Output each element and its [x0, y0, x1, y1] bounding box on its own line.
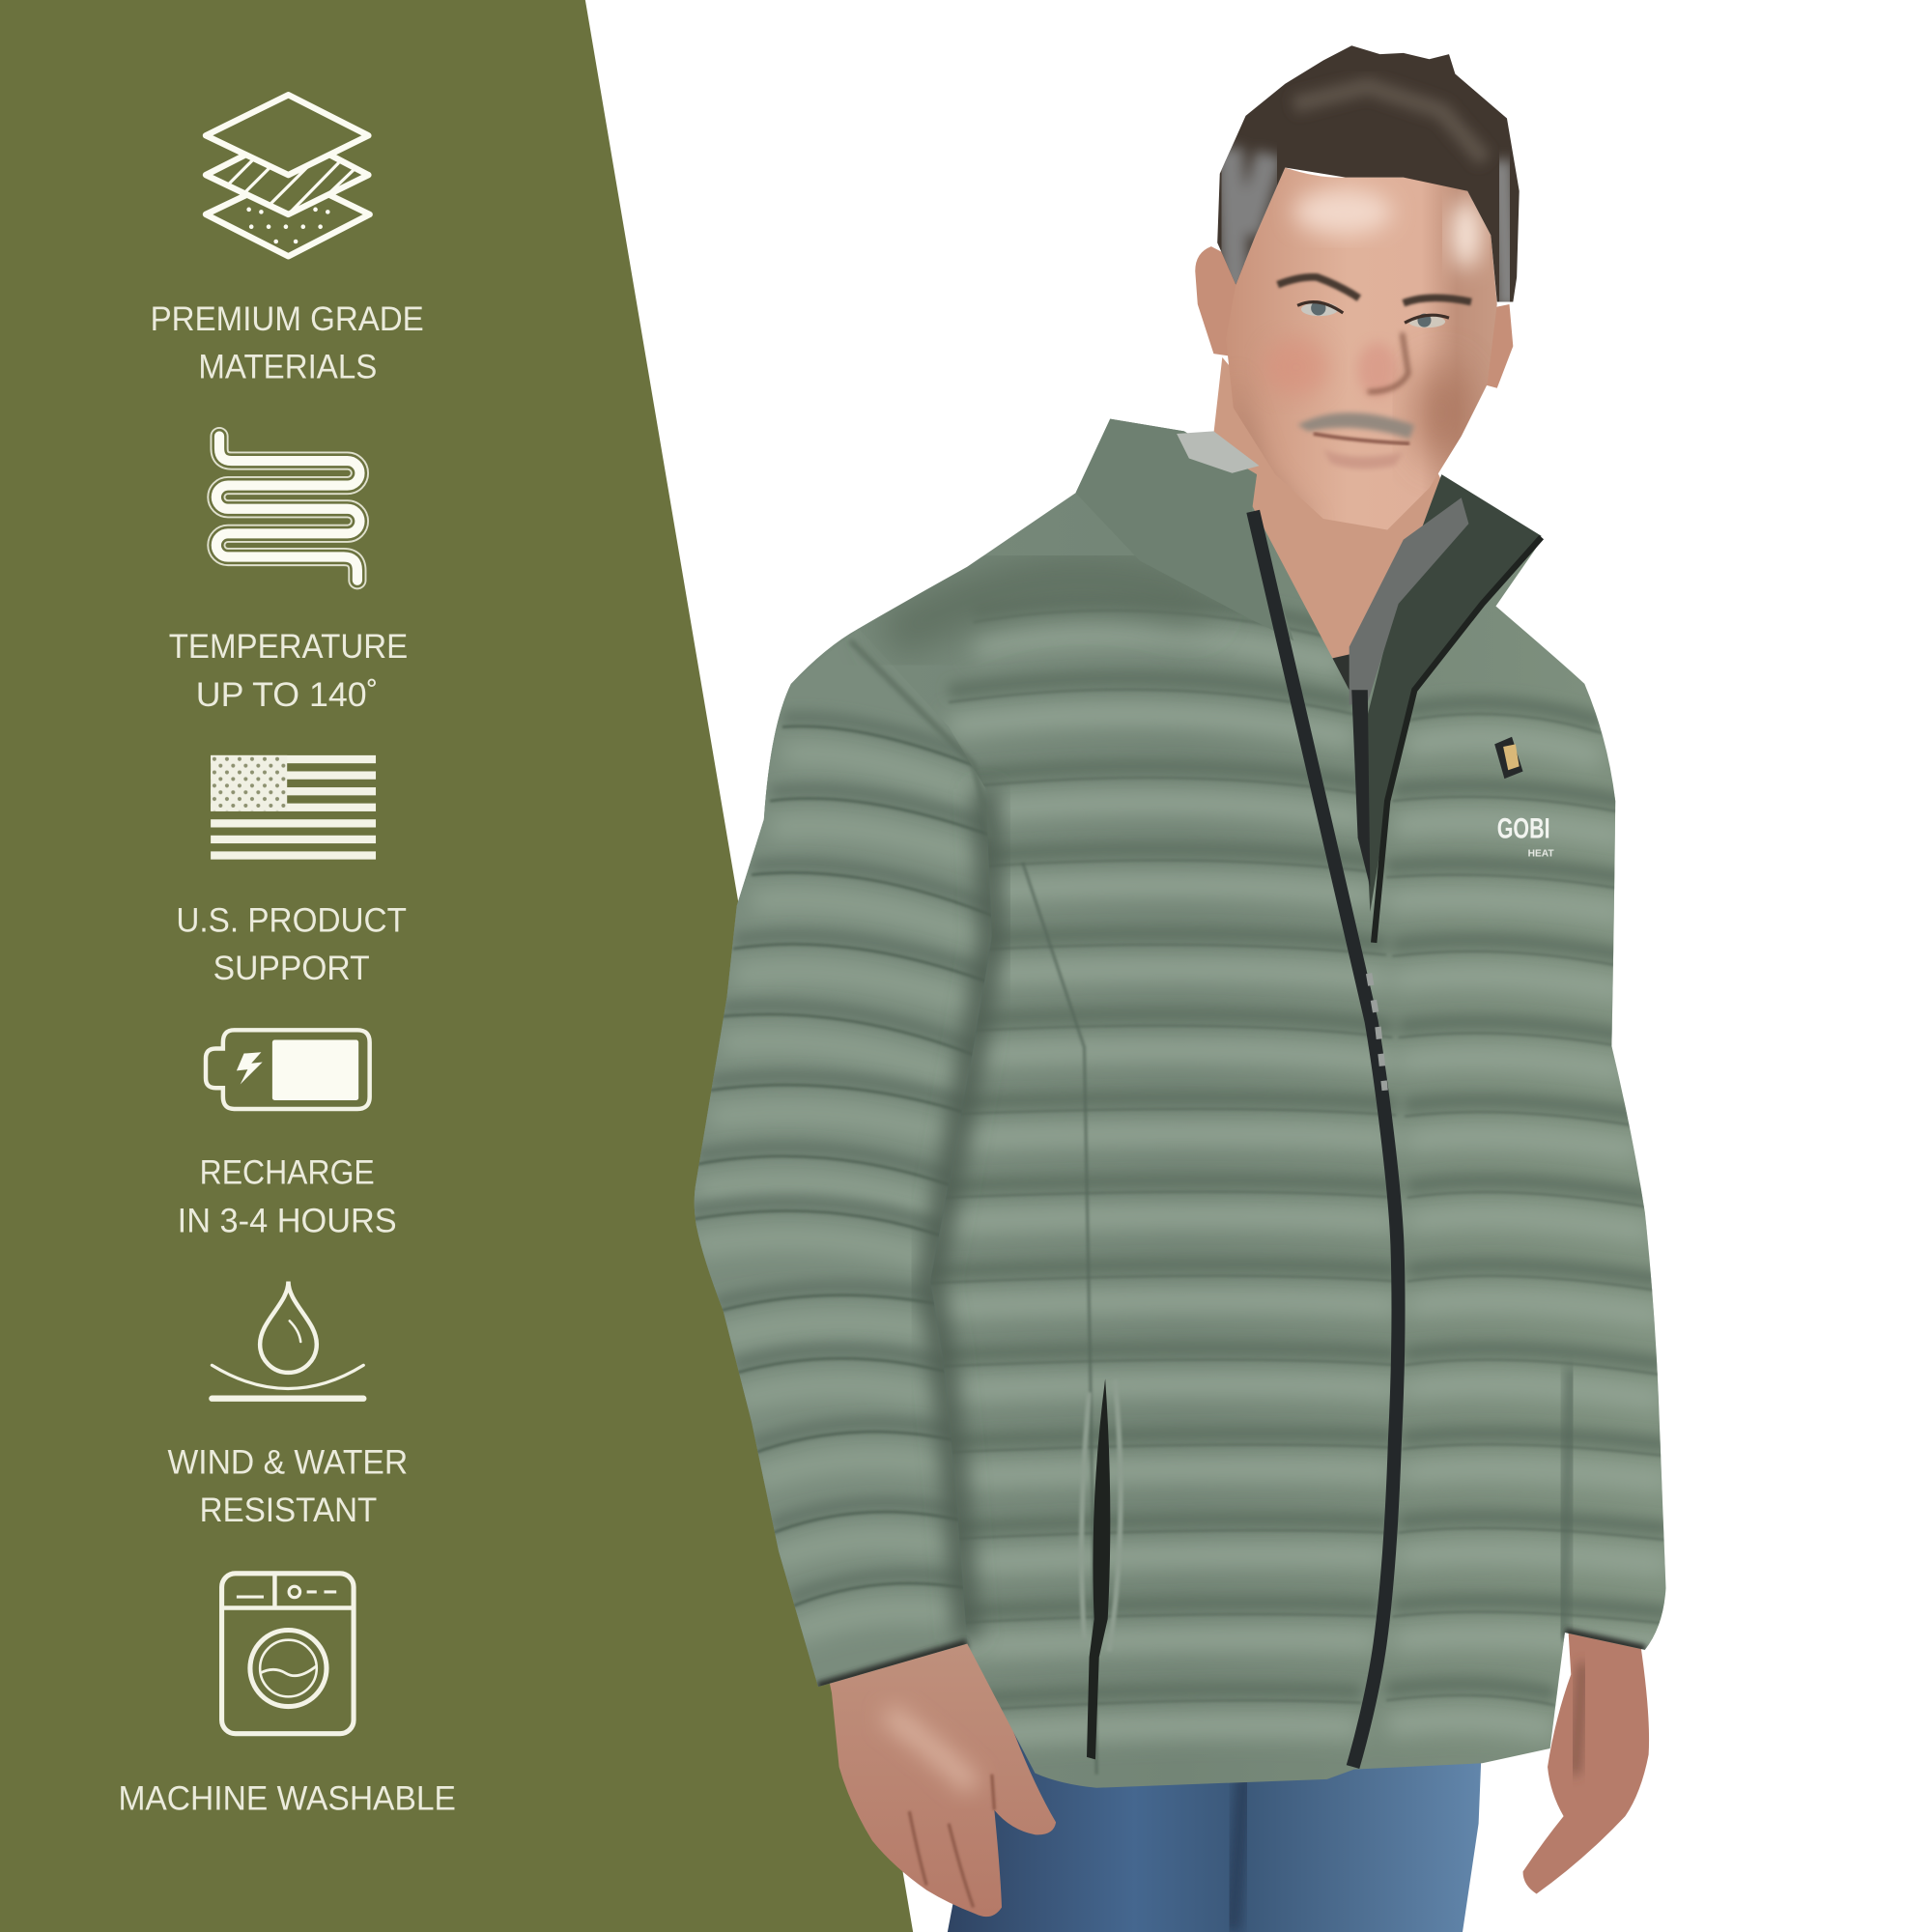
panel: green feature panel — [0, 0, 913, 1932]
hair — [1217, 45, 1520, 308]
jacket logo: GOBI — [1497, 812, 1550, 844]
jacket body — [666, 419, 1669, 1788]
left hand — [826, 1620, 1056, 1917]
t-shirt — [1328, 653, 1368, 764]
inner lining with fleece — [1350, 474, 1542, 912]
chest badge — [1494, 737, 1523, 779]
photo: man wearing green puffer jacket — [666, 45, 1669, 1932]
face — [1226, 167, 1497, 529]
right hand — [1523, 1614, 1649, 1893]
main zipper — [1253, 511, 1398, 1767]
eyes — [1297, 300, 1449, 327]
icon: washing machine — [222, 1574, 354, 1734]
side seam — [1023, 863, 1096, 1775]
text: recharge in 3-4 hours: RECHARGE — [200, 1154, 375, 1192]
pocket zipper — [1082, 1378, 1121, 1759]
text: temperature up to 140: UP TO 140˚ — [196, 676, 379, 714]
icon: US flag — [211, 755, 376, 860]
zipper pull — [1369, 974, 1385, 1091]
neck — [1213, 357, 1460, 702]
cuff shadow — [818, 1633, 1645, 1687]
mouth — [1314, 434, 1409, 443]
eyebrows — [1278, 277, 1471, 303]
text: machine washable: MACHINE WASHABLE — [118, 1780, 456, 1818]
ears — [1195, 246, 1513, 388]
icon: water drop — [212, 1282, 363, 1399]
text: recharge in 3-4 hours — [178, 1154, 397, 1240]
text: temperature up to 140: TEMPERATURE — [169, 628, 408, 666]
text: wind and water resistant: RESISTANT — [200, 1492, 377, 1529]
text: temperature up to 140 — [169, 628, 408, 714]
jacket logo — [1497, 812, 1554, 859]
nose shadow — [1368, 332, 1408, 392]
text: recharge in 3-4 hours: IN 3-4 HOURS — [178, 1203, 397, 1240]
text: US product support: SUPPORT — [213, 950, 370, 987]
text: premium grade materials — [151, 300, 424, 386]
icon: battery charging — [206, 1030, 370, 1109]
head — [1195, 45, 1520, 529]
text: premium grade materials: MATERIALS — [198, 349, 377, 386]
icon: layered materials — [206, 95, 370, 256]
collar — [1076, 419, 1293, 640]
jacket logo: HEAT — [1528, 848, 1554, 859]
jeans — [948, 1731, 1482, 1932]
sleeve — [694, 628, 991, 1687]
text: US product support — [176, 901, 407, 987]
right placket edge — [1374, 537, 1542, 943]
icon: heating element — [216, 437, 359, 581]
text: wind and water resistant — [167, 1444, 408, 1529]
text: premium grade materials: PREMIUM GRADE — [151, 300, 424, 338]
text: wind and water resistant: WIND & WATER — [167, 1444, 408, 1482]
arm shadow — [930, 788, 992, 1638]
shoulder shading — [887, 580, 1208, 640]
text: US product support: U.S. PRODUCT — [176, 901, 407, 939]
